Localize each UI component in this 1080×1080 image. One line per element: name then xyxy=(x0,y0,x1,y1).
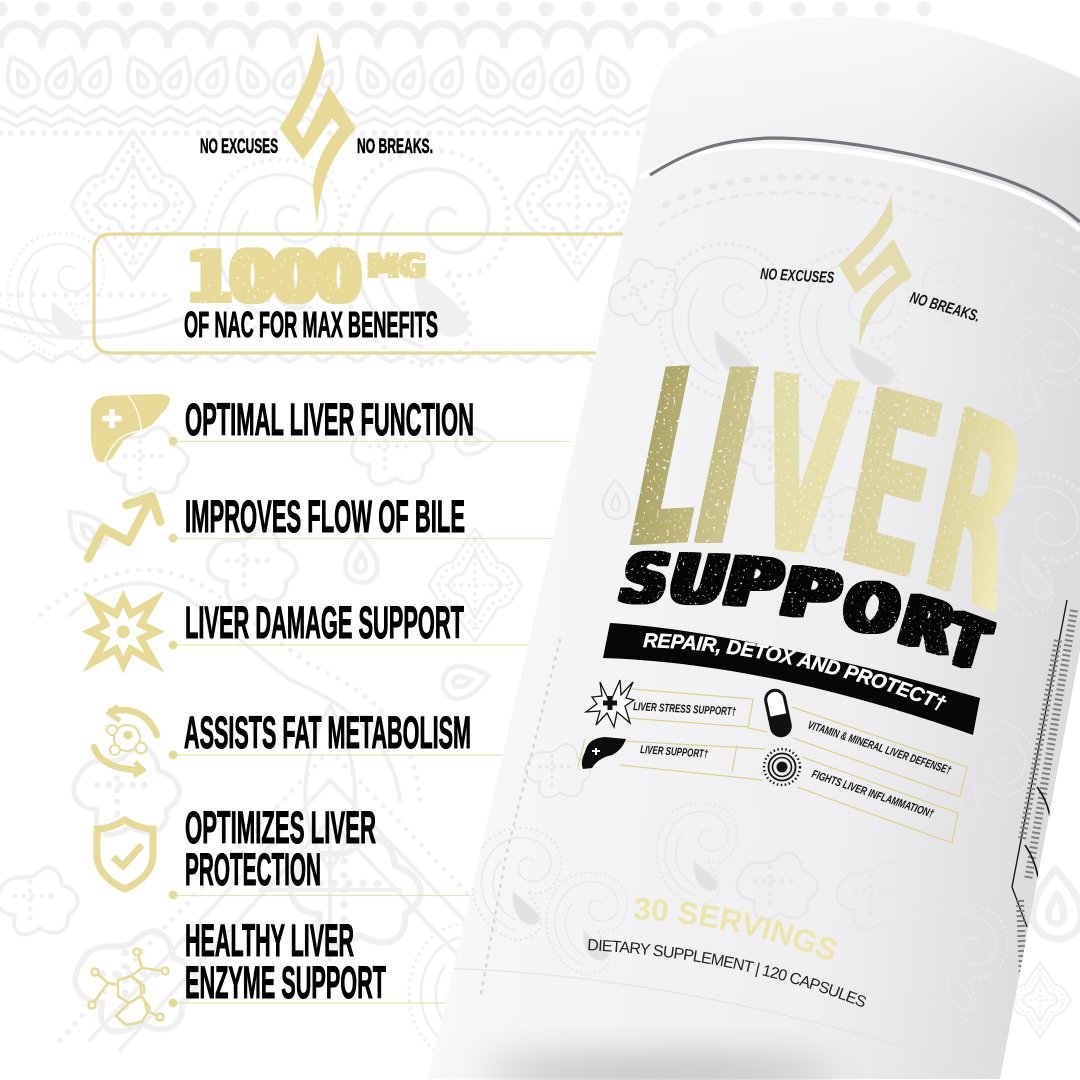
product name: SUPPORT: T xyxy=(940,600,995,687)
product name: LIVER: E xyxy=(823,338,959,636)
bottle shading and embossed label pattern xyxy=(440,15,1080,1080)
supplement descriptor: DIETARY SUPPLEMENT | 120 CAPSULES xyxy=(588,939,866,1007)
icon: shield check xyxy=(97,820,153,889)
benefit: optimizes liver protection: OPTIMIZES LIVER xyxy=(185,802,376,853)
product name: LIVER: I xyxy=(673,320,778,601)
icon: rising arrow xyxy=(88,497,160,558)
callout box: 1000mg NAC xyxy=(94,234,640,353)
product name: LIVER: R xyxy=(908,356,1044,671)
benefit: improves flow of bile xyxy=(88,491,560,558)
label xyxy=(185,915,386,1008)
icon: burst xyxy=(90,599,156,665)
feature: liver stress support: LIVER STRESS SUPPORT† xyxy=(633,701,737,718)
bottle logo mark xyxy=(822,186,929,354)
label: HEALTHY LIVER xyxy=(185,915,354,966)
label feature boxes xyxy=(578,680,967,843)
benefit: liver damage support: LIVER DAMAGE SUPPORT xyxy=(185,597,464,648)
benefit: assists fat metabolism: ASSISTS FAT METABOLISM xyxy=(184,707,471,758)
benefit: liver damage support xyxy=(90,597,530,665)
feature: liver support xyxy=(578,737,765,780)
tagline banner xyxy=(603,623,980,735)
icon: logo mark xyxy=(279,30,356,225)
label: PROTECTION xyxy=(185,844,321,895)
icon: molecule xyxy=(88,948,168,1025)
benefit: optimizes liver protection xyxy=(97,802,480,900)
benefit: healthy liver enzyme support: ENZYME SUPPORT xyxy=(185,957,386,1008)
feature: liver stress support xyxy=(586,680,767,732)
product name: SUPPORT: O xyxy=(836,566,907,652)
big number 1000: 1000 xyxy=(188,235,360,319)
product name: LIVER: V xyxy=(739,325,866,613)
feature: fights liver inflammation xyxy=(764,749,958,843)
feature: vitamin and mineral liver defense xyxy=(764,689,967,797)
banner text xyxy=(643,647,945,712)
box outline xyxy=(94,234,640,353)
benefit: assists fat metabolism xyxy=(94,706,510,776)
product name: SUPPORT: S xyxy=(613,541,677,619)
product name: SUPPORT: U xyxy=(661,540,735,619)
icon: liver xyxy=(91,394,170,462)
connector line xyxy=(168,890,480,900)
product name: SUPPORT xyxy=(613,540,995,687)
banner shape xyxy=(603,623,980,735)
product name: SUPPORT: P xyxy=(716,542,791,624)
product name: LIVER xyxy=(611,316,1044,671)
product name: SUPPORT: R xyxy=(892,580,962,670)
connector line xyxy=(168,640,530,650)
unit MG: MG xyxy=(367,247,426,285)
benefit list xyxy=(88,394,570,1025)
bottle body xyxy=(428,17,1080,1079)
connector line xyxy=(168,998,460,1008)
feature: vitamin and mineral liver defense: VITAMIN & MINERAL LIVER DEFENSE† xyxy=(806,719,953,777)
tagline left: NO EXCUSES xyxy=(200,135,278,158)
benefit: healthy liver enzyme support xyxy=(88,915,460,1025)
connector line xyxy=(168,534,560,542)
product bottle xyxy=(434,26,1080,1080)
feature: liver support: LIVER SUPPORT† xyxy=(640,744,709,761)
benefit: optimal liver function xyxy=(91,394,570,462)
bottle tagline left: NO EXCUSES xyxy=(760,266,835,287)
tagline banner: REPAIR, DETOX AND PROTECT† xyxy=(643,633,947,710)
connector line xyxy=(168,750,510,760)
tagline right: NO BREAKS. xyxy=(357,135,433,158)
label xyxy=(185,802,376,895)
product name: SUPPORT: P xyxy=(773,552,849,636)
bottle tagline right: NO BREAKS. xyxy=(908,290,982,326)
icon: metabolism cycle xyxy=(94,706,157,776)
feature: fights liver inflammation: FIGHTS LIVER INFLAMMATION† xyxy=(810,768,936,821)
benefit: improves flow of bile: IMPROVES FLOW OF BILE xyxy=(185,491,465,542)
brand logo with tagline xyxy=(200,30,433,225)
benefit: optimal liver function: OPTIMAL LIVER FUNCTION xyxy=(185,394,474,445)
connector line xyxy=(168,436,570,446)
callout subtitle: OF NAC FOR MAX BENEFITS xyxy=(184,304,438,345)
servings count: 30 SERVINGS xyxy=(634,898,837,960)
product name: LIVER: L xyxy=(611,316,733,605)
